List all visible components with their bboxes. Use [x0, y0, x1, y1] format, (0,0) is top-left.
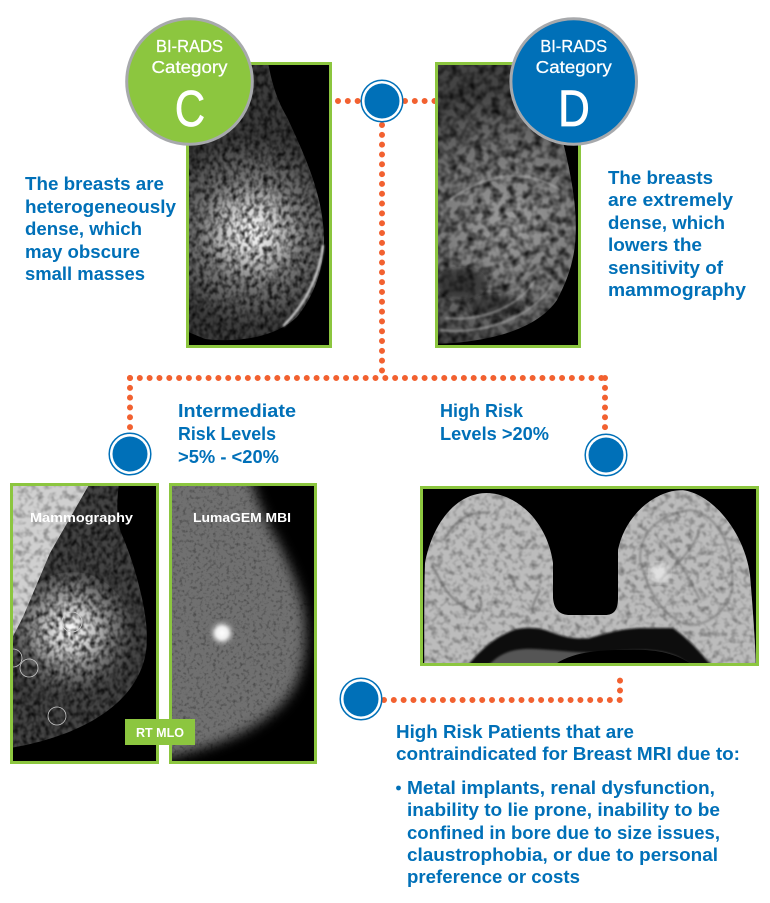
heading: high risk levels: High Risk [440, 400, 524, 421]
panel: mammography image [4, 483, 159, 764]
heading: intermediate risk levels: >5% - <20% [178, 446, 279, 467]
text: category C description [25, 173, 177, 284]
text: category D description: are extremely [608, 189, 734, 210]
list: contraindication reasons: claustrophobia, or due to personal [407, 844, 718, 865]
text: category D description: dense, which [608, 212, 725, 233]
heading: contraindicated patients: High Risk Patients that are [396, 721, 634, 742]
connector: dotted lines from top hub [130, 101, 620, 700]
text: category D description: sensitivity of [608, 257, 724, 278]
badge: BI-RADS category D: Category [536, 57, 612, 77]
heading: contraindicated patients: contraindicated for Breast MRI due to: [396, 743, 740, 764]
text: category D description: The breasts [608, 167, 713, 188]
panel: category D mammogram [435, 62, 581, 348]
heading: intermediate risk levels [178, 400, 296, 467]
panel: mammography image: Mammography [30, 510, 134, 525]
panel: category C mammogram [186, 62, 332, 348]
node: high risk [585, 434, 627, 476]
top hub: blue node [361, 80, 403, 122]
text: category C description: heterogeneously [25, 196, 177, 217]
heading: intermediate risk levels: Intermediate [178, 400, 296, 421]
panel: breast MRI image [420, 486, 759, 666]
panel: LumaGEM MBI image: LumaGEM MBI [193, 510, 291, 525]
node: intermediate risk [109, 433, 151, 475]
panel: LumaGEM MBI image [169, 483, 317, 764]
text: category D description: mammography [608, 279, 747, 300]
badge: BI-RADS category D [511, 19, 636, 144]
list: contraindication reasons: Metal implants, renal dysfunction, [407, 777, 715, 798]
text: category C description: may obscure [25, 241, 140, 262]
text: category C description: The breasts are [25, 173, 164, 194]
label: RT MLO [125, 719, 195, 745]
text: category D description: lowers the [608, 234, 702, 255]
badge: BI-RADS category C [127, 19, 252, 144]
badge: BI-RADS category C: BI-RADS [156, 36, 223, 56]
label: RT MLO: RT MLO [136, 725, 184, 740]
node: contraindicated patients [340, 678, 382, 720]
badge: BI-RADS category D: D [558, 81, 590, 138]
badge: BI-RADS category D: BI-RADS [540, 36, 607, 56]
list: contraindication reasons: preference or costs [407, 866, 580, 887]
heading: high risk levels: Levels >20% [440, 423, 549, 444]
badge: BI-RADS category C: C [175, 80, 205, 137]
heading: high risk levels [440, 400, 549, 444]
heading: contraindicated patients [396, 721, 740, 764]
text: category D description [608, 167, 747, 300]
text: category C description: small masses [25, 263, 145, 284]
heading: intermediate risk levels: Risk Levels [178, 423, 276, 444]
badge: BI-RADS category C: Category [152, 57, 228, 77]
list: contraindication reasons: inability to lie prone, inability to be [407, 799, 720, 820]
list: contraindication reasons: confined in bore due to size issues, [407, 822, 720, 843]
list: contraindication reasons [396, 777, 720, 887]
text: category C description: dense, which [25, 218, 142, 239]
